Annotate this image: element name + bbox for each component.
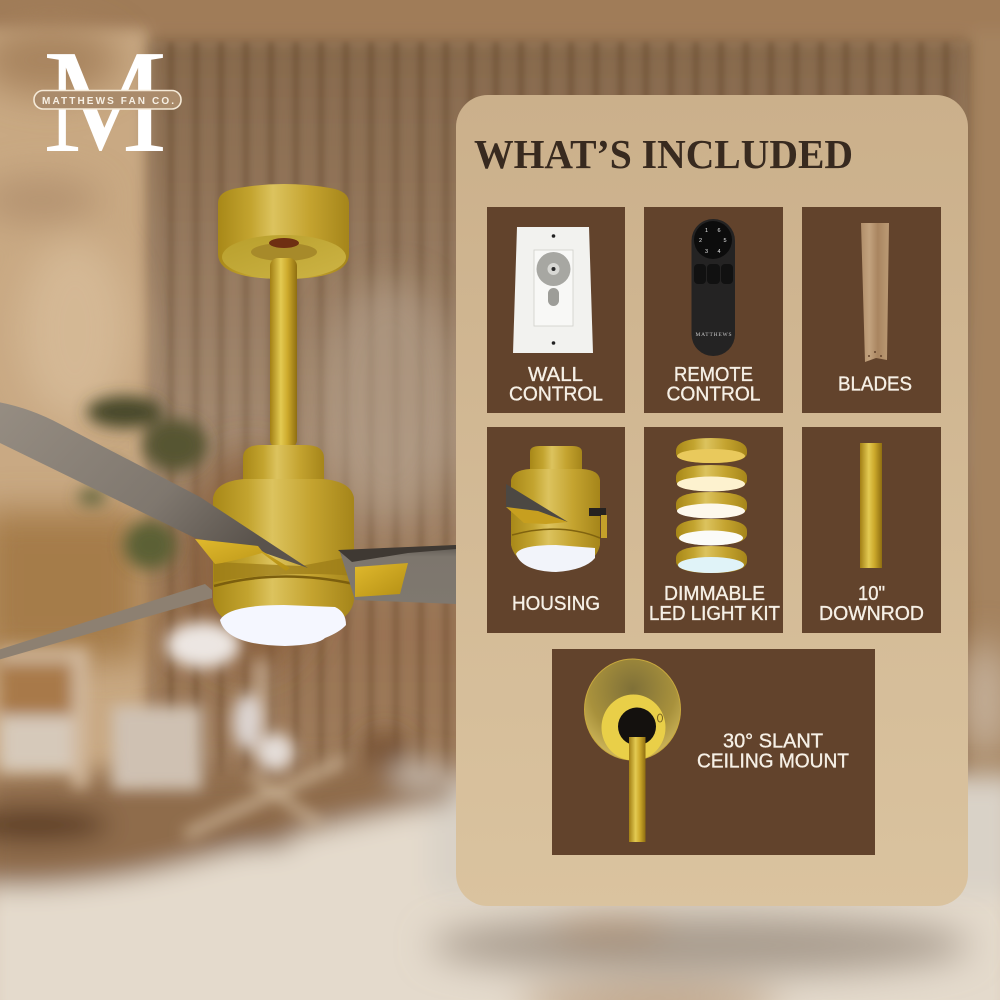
label: wall control [509,364,603,406]
label: housing: HOUSING [512,593,600,615]
logo: Matthews Fan Co.: M [43,20,167,184]
label: wall control: WALL [528,364,583,386]
motor neck [243,445,324,484]
icon: remote: 2 [699,238,702,244]
label: 10 inch downrod: DOWNROD [819,603,924,625]
label: remote control [666,364,760,406]
fan canopy [218,184,349,279]
card: blades [802,207,941,413]
label: remote control: CONTROL [666,384,760,406]
icon: remote: 6 [717,228,721,234]
label: 30 degree slant ceiling mount: 30° SLANT [723,730,823,752]
lower left blade [0,584,212,660]
icon: LED light discs [676,438,747,573]
panel: what's included [456,95,968,906]
logo: Matthews Fan Co.: MATTHEWS FAN CO. [42,96,174,107]
icon: downrod [860,443,882,568]
heading: WHAT’S INCLUDED [474,131,853,177]
ceiling fan [0,184,456,660]
icon: remote: 5 [723,238,727,244]
label: dimmable LED light kit [649,583,780,625]
label: blades: BLADES [838,374,912,396]
icon: remote: 3 [705,249,708,255]
icon: remote [692,219,735,356]
motor housing [213,479,354,632]
card: LED light kit [644,427,783,633]
icon: slant ceiling mount [584,659,680,842]
label: 10 inch downrod: 10" [858,583,885,605]
card: wall control [487,207,625,413]
icon: wall control [513,227,593,353]
right blade [338,545,456,604]
label: 30 degree slant ceiling mount [697,730,849,772]
housing shadow band [214,556,354,582]
card: remote control [644,207,783,413]
card: housing [487,427,625,633]
label: dimmable LED light kit: LED LIGHT KIT [649,603,780,625]
housing ring [214,576,354,586]
icon: housing [506,446,607,572]
icon: blade [861,223,889,362]
label: dimmable LED light kit: DIMMABLE [664,583,765,605]
icon: remote: MATTHEWS [696,332,732,338]
LED light [220,605,346,646]
card: ceiling mount [552,649,875,855]
label: 30 degree slant ceiling mount: CEILING MOUNT [697,750,849,772]
icon: remote: 4 [717,249,721,255]
label: 10 inch downrod [819,583,924,625]
label: wall control: CONTROL [509,384,603,406]
upper left blade [0,402,308,571]
fan downrod [270,258,297,448]
card: downrod [802,427,941,633]
label: remote control: REMOTE [674,364,753,386]
icon: remote: 1 [705,228,708,234]
